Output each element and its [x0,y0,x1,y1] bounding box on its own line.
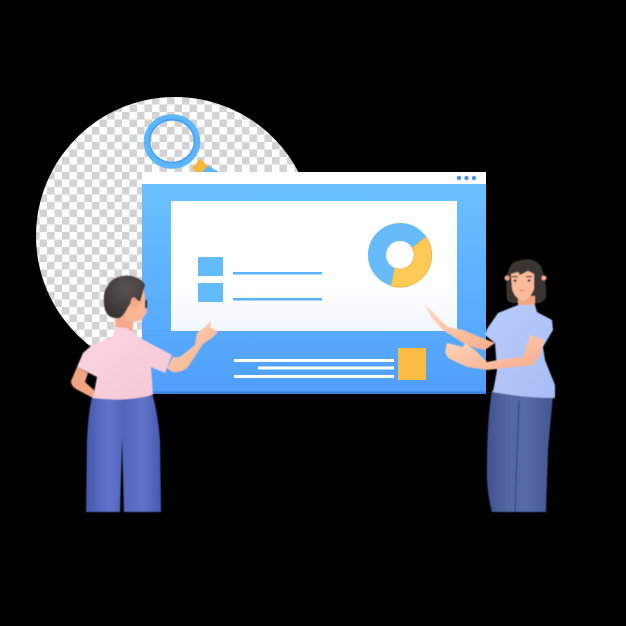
glasses [145,300,147,308]
shirt [77,327,172,399]
yellow square [398,348,426,380]
hair [104,276,145,318]
icon: magnifying glass [147,118,219,173]
neck [115,306,136,332]
title bar [142,172,486,184]
dashboard window [142,172,486,394]
left arm on hip [71,367,95,398]
ear [130,298,138,308]
trouser seam [515,400,519,512]
hair back [506,259,546,303]
face [125,284,147,321]
neck [518,296,535,310]
checkerboard circle [36,97,314,375]
donut chart [377,232,432,287]
window body [142,172,486,394]
right arm and pointing hand [167,321,218,372]
lower arm and open hand [445,335,544,370]
eyes and mouth [512,276,532,291]
shirt [485,305,555,398]
ears [504,276,546,280]
trousers [487,390,553,512]
upper arm and open hand [425,305,495,350]
person: woman presenting the screen [425,259,555,512]
list item squares [198,257,223,302]
trousers [86,396,161,512]
list item lines [233,272,322,300]
white content panel [171,201,457,331]
window control dots [457,176,476,180]
footer text lines [234,359,394,378]
face [511,271,534,301]
person: man pointing at the screen [71,276,218,512]
